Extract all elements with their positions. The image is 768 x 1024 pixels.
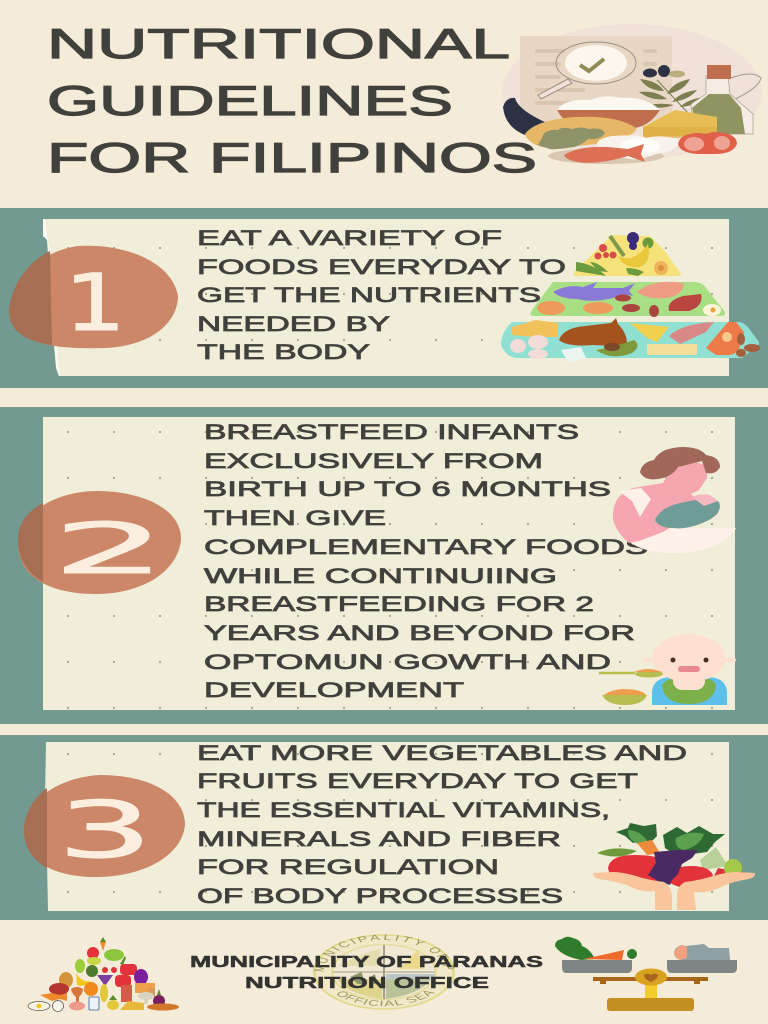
number blob 3: [24, 775, 185, 877]
text: guideline 2: WHILE CONTINUIING: [204, 565, 557, 588]
olive sprig: [639, 65, 704, 114]
footer seal: [313, 934, 455, 1010]
text: guideline 1: THE BODY: [197, 341, 370, 364]
number blob 2: [18, 491, 181, 594]
icon: baby eating: [599, 634, 736, 705]
panel: guideline 2: [0, 407, 768, 724]
number blob 1: [9, 246, 178, 349]
text: guideline 3: MINERALS AND FIBER: [197, 828, 561, 851]
number blob 2: 2: [52, 508, 167, 590]
oil bottle: [691, 65, 761, 134]
text: guideline 3: FOR REGULATION: [197, 856, 499, 879]
text: guideline 1: EAT A VARIETY OF: [197, 227, 502, 250]
text: guideline 1: NEEDED BY: [197, 313, 390, 336]
text: guideline 2: COMPLEMENTARY FOODS: [204, 536, 648, 559]
icon: hands holding fruit and vegetables: [593, 823, 755, 910]
title: GUIDELINES: [47, 77, 453, 124]
footer text: [190, 954, 544, 992]
text: guideline 3: THE ESSENTIAL VITAMINS,: [197, 799, 610, 822]
text: guideline 1: FOODS EVERYDAY TO: [197, 256, 566, 279]
footer seal: MUNICIPALITY OF PARANAS: [313, 934, 454, 972]
title: [47, 20, 537, 181]
text: guideline 2: BIRTH UP TO 6 MONTHS: [204, 478, 611, 501]
text: guideline 2: BREASTFEED INFANTS: [204, 421, 579, 444]
icon: food pyramid: [501, 232, 760, 362]
text: guideline 2: THEN GIVE: [204, 507, 386, 530]
text: guideline 3: FRUITS EVERYDAY TO GET: [197, 770, 638, 793]
footer text: MUNICIPALITY OF PARANAS: [190, 954, 544, 971]
text: guideline 3: OF BODY PROCESSES: [197, 885, 563, 908]
illustration: healthy food and checklist: [502, 24, 762, 164]
text: guideline 2: DEVELOPMENT: [204, 679, 464, 702]
icon: breastfeeding mother: [613, 447, 736, 553]
title: FOR FILIPINOS: [47, 134, 537, 181]
footer seal: OFFICIAL SEAL: [337, 990, 435, 1006]
icon: balance scale with food: [555, 937, 737, 1011]
text: guideline 2: EXCLUSIVELY FROM: [204, 450, 543, 473]
number blob 1: 1: [64, 259, 126, 349]
text: guideline 1: [197, 227, 566, 364]
icon: food pyramid of fruits and vegetables: [28, 937, 179, 1012]
text: guideline 2: YEARS AND BEYOND FOR: [204, 622, 635, 645]
text: guideline 2: OPTOMUN GOWTH AND: [204, 651, 611, 674]
title: NUTRITIONAL: [47, 20, 510, 67]
footer text: NUTRITION OFFICE: [245, 975, 490, 992]
text: guideline 1: GET THE NUTRIENTS: [197, 284, 541, 307]
text: guideline 3: EAT MORE VEGETABLES AND: [197, 742, 687, 765]
text: guideline 2: BREASTFEEDING FOR 2: [204, 593, 594, 616]
panel: guideline 1: [0, 208, 768, 388]
panel: guideline 3: [0, 735, 768, 920]
number blob 3: 3: [57, 786, 153, 876]
text: guideline 2: [204, 421, 648, 702]
text: guideline 3: [197, 742, 687, 908]
